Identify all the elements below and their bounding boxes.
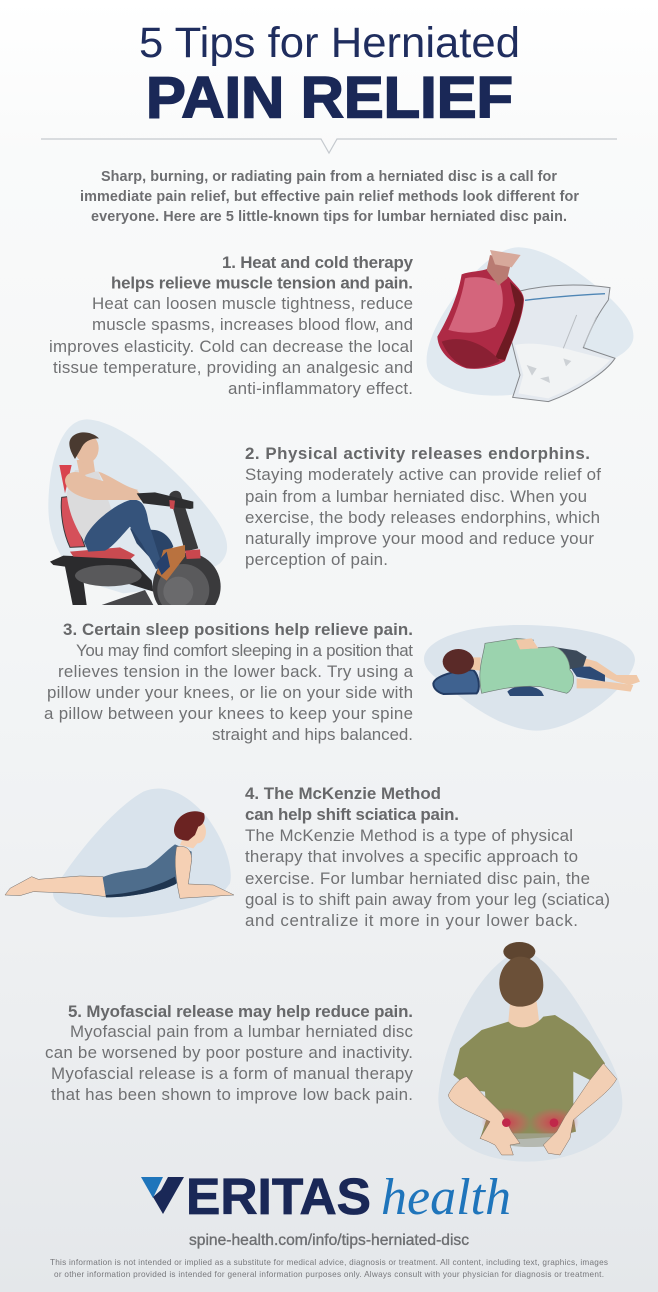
- handlebar and pedal: [137, 492, 201, 581]
- tip 5 text: can be worsened by poor posture and inactivity.: [45, 1043, 413, 1062]
- tip 5 text: Myofascial release is a form of manual therapy: [51, 1064, 414, 1083]
- sweater: [453, 1015, 605, 1139]
- legs: [5, 876, 106, 897]
- blob behind figure: [438, 950, 622, 1162]
- icon: woman holding lower back: [438, 942, 622, 1162]
- tip 1 text: tissue temperature, providing an analgesic and: [53, 358, 413, 377]
- tip 3 text: a pillow between your knees to keep your spine: [44, 704, 413, 723]
- hair: [499, 942, 543, 1007]
- tip 2 text: pain from a lumbar herniated disc. When you: [245, 487, 587, 506]
- arm: [175, 846, 234, 898]
- head pillow: [433, 670, 479, 694]
- tip 1 text: improves elasticity. Cold can decrease the local: [49, 337, 413, 356]
- tip 4 text: therapy that involves a specific approach to: [245, 847, 578, 866]
- tip 5 text: Myofascial pain from a lumbar herniated disc: [70, 1022, 413, 1041]
- legs: [552, 647, 640, 692]
- tip 3 text: 3. Certain sleep positions help relieve pain.: [63, 620, 413, 639]
- blob behind sleeper: [424, 625, 635, 731]
- tip 1 text: helps relieve muscle tension and pain.: [111, 274, 413, 292]
- tip 3 text: relieves tension in the lower back. Try using a: [58, 662, 414, 681]
- head: [174, 811, 206, 848]
- tip 4 text: can help shift sciatica pain.: [245, 805, 459, 824]
- bike frame: [50, 490, 221, 605]
- tip 2 text: perception of pain.: [245, 550, 388, 569]
- blob behind rider: [48, 419, 227, 593]
- tip 2 text: Staying moderately active can provide relief of: [245, 465, 601, 484]
- intro text: Sharp, burning, or radiating pain from a herniated disc is a call for: [101, 169, 557, 185]
- disclaimer: [50, 1258, 608, 1279]
- knee pillow: [507, 686, 544, 696]
- tip 3 text: straight and hips balanced.: [212, 725, 413, 744]
- icon: person sleeping on side: [424, 625, 640, 731]
- swimsuit: [103, 844, 192, 897]
- tip 4 text: 4. The McKenzie Method: [245, 784, 441, 803]
- tip 1 text: Heat can loosen muscle tightness, reduce: [92, 294, 413, 313]
- tip 2 text: naturally improve your mood and reduce your: [245, 529, 594, 548]
- tip 4 text: The McKenzie Method is a type of physical: [245, 826, 573, 845]
- tip 1 text: 1. Heat and cold therapy: [222, 253, 414, 272]
- tip 1 text: anti-inflammatory effect.: [228, 379, 413, 398]
- tip 4 text: exercise. For lumbar herniated disc pain, the: [245, 869, 590, 888]
- head: [443, 649, 481, 674]
- blob behind figure: [53, 788, 231, 917]
- icon: hot water bottle and ice bag: [427, 247, 633, 402]
- tip 2 text: exercise, the body releases endorphins, which: [245, 508, 600, 527]
- seat: [59, 465, 135, 559]
- tip 3 text: pillow under your knees, or lie on your side with: [47, 683, 413, 702]
- title: 5 Tips for Herniated: [139, 19, 520, 67]
- title: PAIN RELIEF: [146, 66, 513, 130]
- intro text: [80, 169, 579, 225]
- icon: woman doing McKenzie press-up: [5, 788, 234, 917]
- icon: woman on recumbent bike: [48, 419, 227, 621]
- tip 1 text: [49, 253, 414, 398]
- water bottle: [437, 250, 524, 369]
- intro text: everyone. Here are 5 little-known tips for lumbar herniated disc pain.: [91, 209, 567, 225]
- disclaimer: or other information provided is intended for general information purposes only. Always consult with your physician for diagnosis or treatment.: [54, 1270, 604, 1279]
- intro text: immediate pain relief, but effective pain relief methods look different for: [80, 189, 579, 205]
- divider with pointer: [41, 139, 617, 153]
- logo: Veritas Health: [141, 1168, 511, 1226]
- rider: [65, 432, 173, 569]
- ice bag: [510, 285, 615, 402]
- logo: Veritas Health: ERITAS: [186, 1168, 371, 1225]
- tip 2 text: [245, 444, 601, 569]
- logo: Veritas Health: health: [381, 1169, 511, 1226]
- pain points: [502, 1118, 558, 1127]
- blob behind bottle: [427, 247, 633, 396]
- pain glow: [481, 1108, 579, 1147]
- hand: [516, 638, 538, 649]
- tip 4 text: and centralize it more in your lower back.: [245, 911, 578, 930]
- tip 1 text: muscle spasms, increases blood flow, and: [92, 315, 413, 334]
- tip 5 text: that has been shown to improve low back pain.: [51, 1085, 413, 1104]
- disclaimer: This information is not intended or implied as a substitute for medical advice, diagnosis or treatment. All content, including text, graphics, images: [50, 1258, 608, 1267]
- tip 4 text: [245, 784, 610, 930]
- neck: [508, 1002, 539, 1029]
- torso: [480, 638, 574, 693]
- tip 3 text: [44, 620, 414, 744]
- title: [139, 19, 520, 130]
- tip 5 text: [45, 1002, 414, 1104]
- source url: spine-health.com/info/tips-herniated-disc: [189, 1232, 469, 1249]
- arms and hands: [448, 1063, 617, 1155]
- tip 4 text: goal is to shift pain away from your leg (sciatica): [245, 890, 610, 909]
- tip 5 text: 5. Myofascial release may help reduce pain.: [68, 1002, 413, 1021]
- tip 3 text: You may find comfort sleeping in a position that: [76, 641, 413, 660]
- tip 2 text: 2. Physical activity releases endorphins.: [245, 444, 590, 463]
